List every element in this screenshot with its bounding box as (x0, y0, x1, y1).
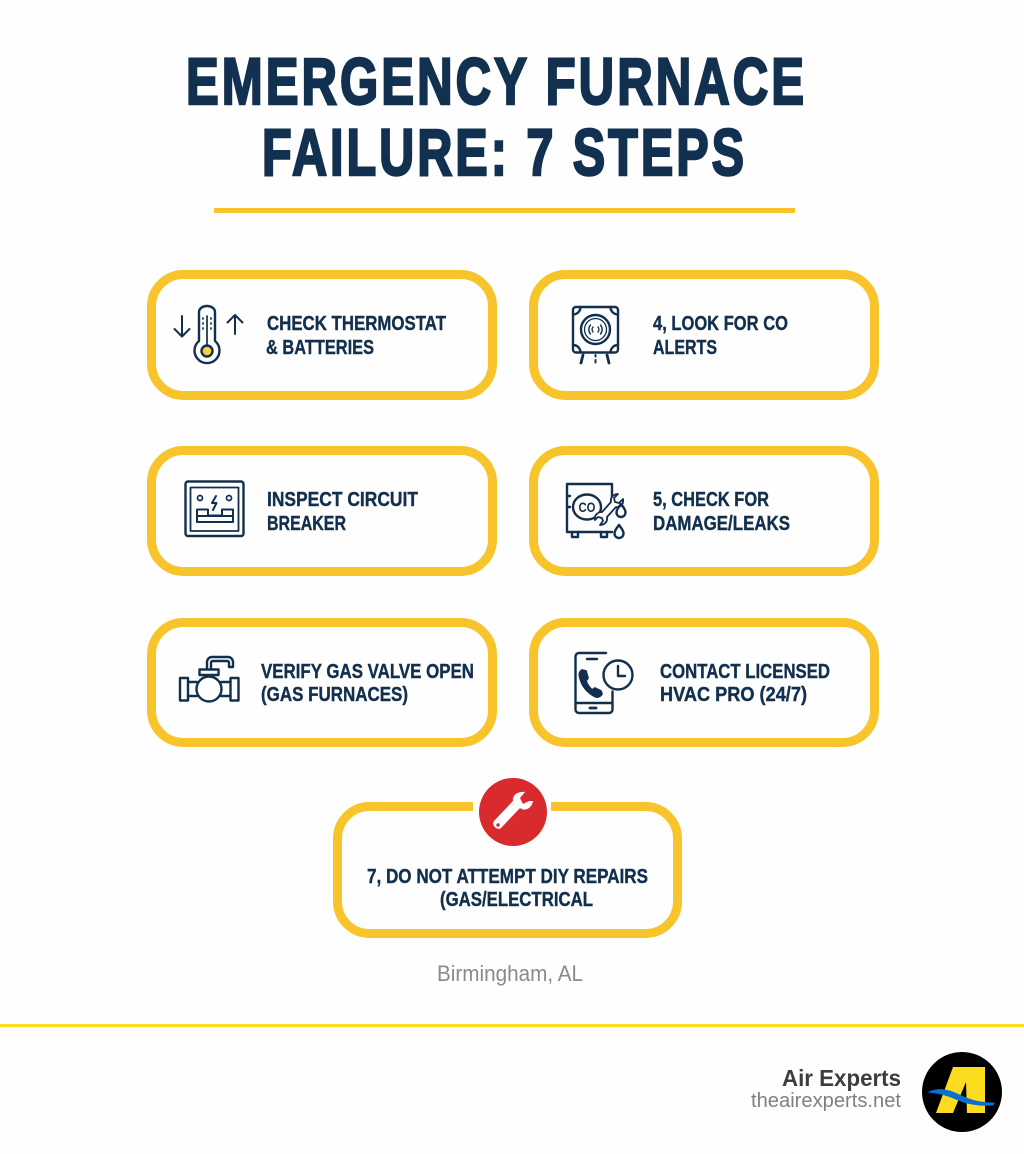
card border (152, 622, 492, 742)
step text (653, 312, 788, 359)
step text (261, 660, 474, 706)
card border (338, 806, 678, 934)
card border (152, 450, 492, 572)
footer brand text: Air Experts (782, 1065, 901, 1091)
step text: & BATTERIES (266, 336, 374, 359)
step text: HVAC PRO (24/7) (660, 683, 807, 706)
panel: step 7 do not attempt DIY repairs (338, 778, 678, 934)
step text: ALERTS (653, 336, 717, 359)
step text: 5, CHECK FOR (653, 488, 769, 511)
step text: VERIFY GAS VALVE OPEN (261, 660, 474, 683)
icon: furnace with wrench and drops: CO (578, 500, 596, 515)
step text: DAMAGE/LEAKS (653, 512, 790, 535)
step text: (GAS FURNACES) (261, 683, 408, 706)
card border (534, 274, 874, 396)
panel: step 1 check thermostat (152, 274, 492, 396)
step text: (GAS/ELECTRICAL (440, 888, 593, 911)
icon: circuit breaker panel (186, 482, 244, 536)
step text: INSPECT CIRCUIT (267, 488, 418, 511)
title: EMERGENCY FURNACE (186, 45, 807, 118)
step text (367, 865, 648, 911)
step text (266, 312, 446, 359)
title underline (214, 208, 795, 213)
card border (152, 274, 492, 396)
footer brand text (751, 1065, 901, 1112)
title: FAILURE: 7 STEPS (262, 116, 747, 189)
step text (267, 488, 418, 535)
title (186, 45, 807, 189)
icon: furnace with wrench and drops (567, 484, 626, 538)
step text (660, 660, 830, 706)
step text: CHECK THERMOSTAT (267, 312, 446, 335)
icon: thermometer (174, 306, 242, 363)
panel: step 5 check for damage and leaks (534, 450, 874, 572)
step text: 7, DO NOT ATTEMPT DIY REPAIRS (367, 865, 648, 888)
step text (653, 488, 790, 535)
card border (534, 622, 874, 742)
footer brand text: theairexperts.net (751, 1090, 901, 1112)
panel: step 4 look for CO alerts (534, 274, 874, 396)
icon: red wrench badge (479, 778, 547, 846)
panel: step 2 inspect circuit breaker (152, 450, 492, 572)
location label: Birmingham, AL (437, 961, 583, 986)
icon: CO alarm (573, 307, 618, 363)
footer divider (0, 1024, 1024, 1027)
step text: 4, LOOK FOR CO (653, 312, 788, 335)
logo: Air Experts badge (922, 1052, 1002, 1132)
icon: gas valve (180, 657, 238, 702)
step text: CONTACT LICENSED (660, 660, 830, 683)
panel: step 6 contact licensed HVAC pro (534, 622, 874, 742)
step text: BREAKER (267, 512, 346, 535)
icon: phone with clock (576, 653, 632, 713)
card border (534, 450, 874, 572)
panel: step 3 verify gas valve (152, 622, 492, 742)
